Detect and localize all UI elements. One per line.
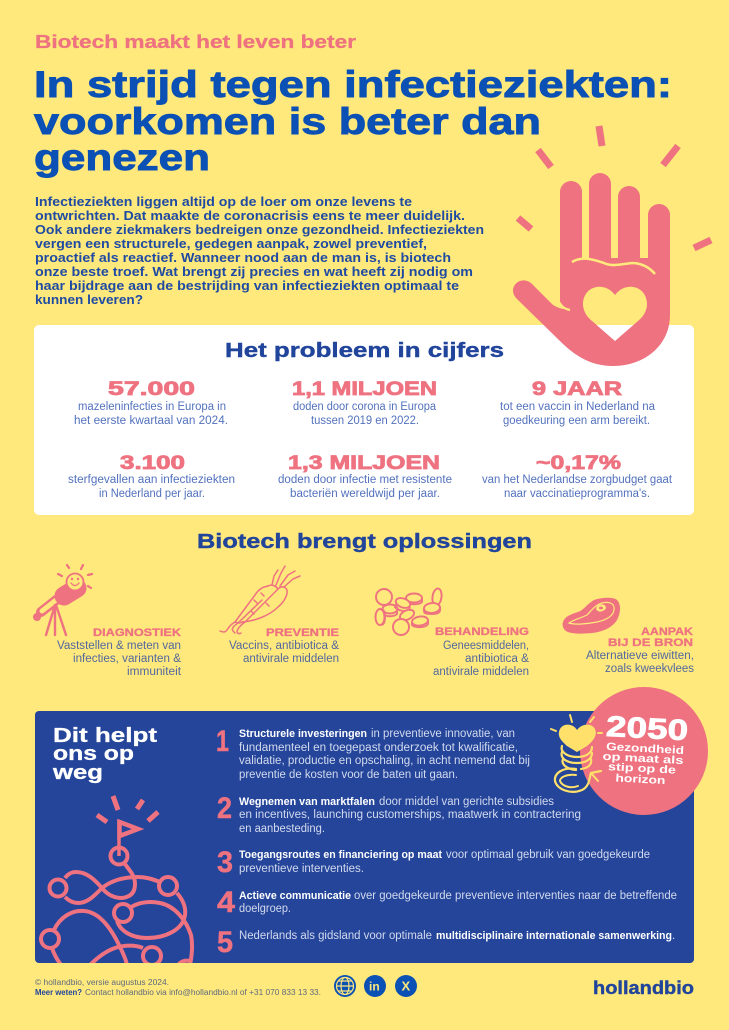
stat: 1,3 miljoen: 1,3 MILJOEN [288, 453, 440, 474]
item 4: over goedgekeurde preventieve interventies naar de betreffende [354, 890, 677, 902]
stat: 3.100 [68, 453, 235, 500]
item 3: Toegangsroutes en financiering op maat [239, 849, 442, 861]
heading: dit helpt ons op weg: ons op [53, 743, 134, 765]
item 1: Structurele investeringen [239, 728, 367, 740]
description: preventie: antivirale middelen [243, 653, 339, 665]
footer text: Meer weten? [35, 988, 82, 997]
icon: x [395, 975, 417, 997]
stat: 0,17% [482, 453, 673, 500]
solution: aanpak bij de bron [563, 598, 694, 675]
stat: 1,1 miljoen: doden door corona in Europa [293, 401, 437, 413]
panel: dit helpt ons op weg [35, 711, 694, 966]
footer text [35, 978, 321, 997]
logo: hollandbio: hollandbio [593, 978, 694, 998]
heading: het probleem in cijfers: Het probleem in cijfers [225, 340, 504, 362]
item 5: Nederlands als gidsland voor optimale [239, 930, 432, 942]
label: preventie: PREVENTIE [266, 627, 339, 639]
stat: 0,17%: naar vaccinatieprogramma's. [504, 488, 650, 500]
item 1: in preventieve innovatie, van [371, 728, 515, 740]
stat: 1,3 miljoen: bacteriën wereldwijd per jaar. [290, 488, 440, 500]
description: preventie: Vaccins, antibiotica & [229, 640, 339, 652]
title [34, 64, 672, 178]
item 4: Actieve communicatie [239, 890, 351, 902]
icon: linkedin: in [369, 980, 380, 994]
item 1: 1 [216, 725, 229, 758]
item 1: validatie, productie en opschaling, in acht nemend dat bij [239, 755, 530, 767]
callout text: stip op de [608, 761, 676, 777]
item 2: door middel van gerichte subsidies [379, 796, 554, 808]
stat: 3.100: sterfgevallen aan infectieziekten [68, 474, 235, 486]
title: voorkomen is beter dan [34, 101, 541, 142]
description: aanpak bij de bron: zoals kweekvlees [605, 663, 694, 675]
stat: 57.000: het eerste kwartaal van 2024. [74, 415, 228, 427]
item 5: 5 [217, 926, 233, 959]
description: diagnostiek: Vaststellen & meten van [57, 640, 181, 652]
stat: 57.000: 57.000 [108, 379, 195, 400]
item 2: en aanbesteding. [239, 823, 325, 835]
icon: x: X [402, 978, 410, 994]
stat: 0,17%: ~0,17% [536, 453, 621, 474]
description: behandeling: Geneesmiddelen, [443, 640, 529, 652]
item 3: 3 [217, 846, 233, 879]
stat: 1,1 miljoen: tussen 2019 en 2022. [311, 415, 419, 427]
solution: preventie [220, 566, 339, 665]
description: behandeling: antivirale middelen [433, 666, 529, 678]
intro text: Ook andere ziekmakers bedreigen onze gezondheid. Infectieziekten [35, 223, 484, 237]
callout text: Gezondheid [606, 741, 684, 757]
item 4 [217, 886, 677, 919]
stat: 1,3 miljoen [278, 453, 452, 500]
description: behandeling [433, 640, 529, 678]
description: preventie [229, 640, 339, 665]
callout: 2050 [580, 687, 708, 815]
icon: heart with measuring tape [551, 715, 602, 792]
solution: behandeling [376, 588, 529, 678]
item 2: Wegnemen van marktfalen [239, 796, 375, 808]
stat: 57.000 [74, 379, 228, 427]
item 5: multidisciplinaire internationale samenwerking [436, 930, 672, 942]
title: genezen [34, 137, 210, 178]
callout text: op maat als [602, 751, 684, 767]
callout text: 2050 [605, 711, 689, 747]
item 2: en incentives, launching customerships, maatwerk in contractering [239, 809, 581, 821]
icon: website [334, 975, 356, 997]
item 5: . [672, 930, 675, 942]
intro text [35, 195, 484, 307]
item 3: preventieve interventies. [239, 863, 364, 875]
callout text [601, 711, 689, 788]
icon: hand with heart [513, 126, 711, 366]
icon: pills [376, 588, 443, 635]
icon: winding route with flag [41, 796, 192, 966]
stat: 1,1 miljoen [292, 379, 437, 427]
description: behandeling: antibiotica & [465, 653, 529, 665]
item 1: fundamenteel en toegepast onderzoek tot kwalificatie, [239, 742, 518, 754]
panel: het probleem in cijfers [34, 325, 694, 515]
intro text: onze beste troef. Wat brengt zij precies en wat heeft zij nodig om [35, 265, 473, 279]
callout text: horizon [615, 773, 666, 787]
intro text: proactief als reactief. Wanneer nood aan de man is, is biotech [35, 251, 451, 265]
stat: 3.100: 3.100 [120, 453, 185, 474]
footer text: Contact hollandbio via info@hollandbio.nl of +31 070 833 13 33. [85, 988, 321, 997]
stat: 3.100: in Nederland per jaar. [99, 488, 205, 500]
item 5 [217, 926, 675, 959]
item 1 [216, 725, 530, 781]
icon: carrots [220, 566, 300, 634]
label: aanpak bij de bron: BIJ DE BRON [608, 637, 693, 649]
stat: 0,17%: van het Nederlandse zorgbudget gaat [482, 474, 673, 486]
label: aanpak bij de bron [608, 626, 693, 649]
kicker: Biotech maakt het leven beter [35, 32, 356, 52]
item 4: doelgroep. [239, 903, 291, 915]
item 2 [217, 792, 581, 835]
stat: 9 jaar: 9 JAAR [532, 379, 622, 400]
heading: dit helpt ons op weg: weg [52, 762, 103, 784]
stat: 1,1 miljoen: 1,1 MILJOEN [292, 379, 437, 400]
intro text: haar bijdrage aan de bestrijding van infectieziekten optimaal te [35, 279, 459, 293]
label: diagnostiek: DIAGNOSTIEK [93, 627, 181, 639]
icon: steak [563, 598, 620, 634]
description: diagnostiek: infecties, varianten & [73, 653, 181, 665]
footer text: © hollandbio, versie augustus 2024. [35, 978, 169, 987]
stat: 9 jaar: tot een vaccin in Nederland na [500, 401, 656, 413]
item 4: 4 [217, 886, 235, 919]
label: aanpak bij de bron: AANPAK [641, 626, 693, 638]
label: behandeling: BEHANDELING [435, 626, 529, 638]
heading: dit helpt ons op weg: Dit helpt [53, 725, 157, 747]
heading: biotech brengt oplossingen: Biotech brengt oplossingen [197, 531, 532, 553]
title: In strijd tegen infectieziekten: [34, 64, 672, 105]
description: aanpak bij de bron [586, 650, 694, 675]
icon: telescope with smiling sun [33, 565, 92, 635]
intro text: Infectieziekten liggen altijd op de loer om onze levens te [35, 195, 412, 209]
stat: 1,3 miljoen: doden door infectie met resistente [278, 474, 452, 486]
item 2: 2 [217, 792, 232, 825]
icon: linkedin [364, 975, 386, 997]
stat: 9 jaar: goedkeuring een arm bereikt. [503, 415, 650, 427]
description: diagnostiek: immuniteit [127, 666, 182, 678]
intro text: vergen een structurele, gedegen aanpak, zowel preventief, [35, 237, 427, 251]
description: aanpak bij de bron: Alternatieve eiwitten, [586, 650, 694, 662]
intro text: kunnen leveren? [35, 293, 143, 307]
stat: 9 jaar [500, 379, 656, 427]
heading: dit helpt ons op weg [52, 725, 157, 784]
solution: diagnostiek [33, 565, 182, 678]
description: diagnostiek [57, 640, 182, 678]
item 1: preventie de kosten voor de baten uit gaan. [239, 769, 458, 781]
item 3 [217, 846, 650, 879]
intro text: ontwrichten. Dat maakte de coronacrisis eens te meer duidelijk. [35, 209, 465, 223]
stat: 57.000: mazeleninfecties in Europa in [78, 401, 226, 413]
item 3: voor optimaal gebruik van goedgekeurde [446, 849, 650, 861]
